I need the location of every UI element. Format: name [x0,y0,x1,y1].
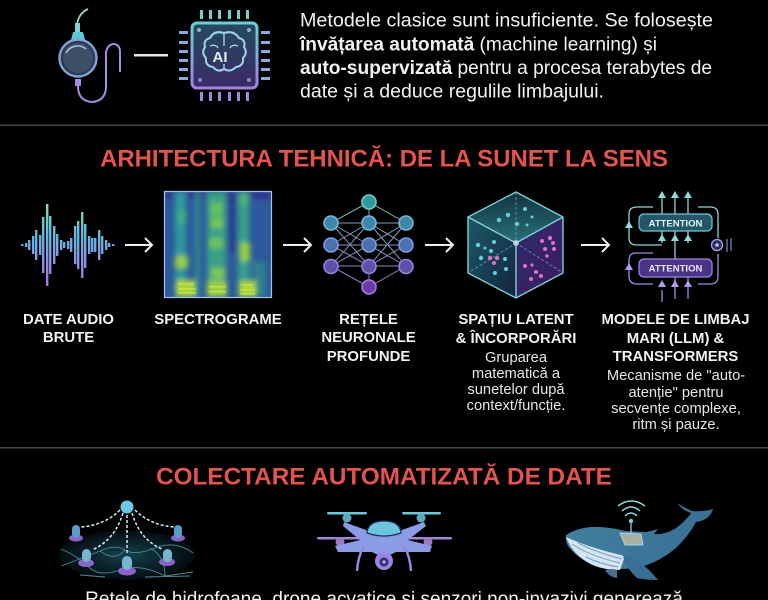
icon: AI chip [179,10,270,101]
description: large language models: atenție" pentru [628,385,724,401]
arrow [581,238,609,252]
label: large language models: MODELE DE LIMBAJ [601,312,750,328]
connector line [134,54,168,56]
icon: neural network [324,195,413,294]
icon: aquatic drone [317,512,452,571]
icon: tagged whale [566,501,713,580]
description: latent space: matematică a [472,366,561,382]
icon: transformer attention: ATTENTION [649,264,702,274]
label: large language models: MARI (LLM) & [627,331,725,347]
intro text: Metodele clasice sunt insuficiente. Se folosește [300,10,713,32]
chart: spectrogram [164,192,272,298]
label: deep neural networks: PROFUNDE [327,349,410,365]
icon: AI chip: AI [212,49,228,66]
label: deep neural networks: NEURONALE [321,330,416,346]
intro text: date și a deduce regulile limbajului. [300,80,604,102]
icon: audio waveform [21,204,114,286]
panel: automated data collection [59,462,713,600]
icon: hydrophone network [59,500,195,580]
panel: intro [60,9,713,102]
arrow [425,238,453,252]
heading: technical architecture: ARHITECTURA TEHNICĂ: DE LA SUNET LA SENS [100,144,668,172]
label: latent space: SPAȚIU LATENT [458,312,574,328]
icon: hydrophone [60,9,120,102]
intro text: învățarea automată (machine learning) și [299,34,657,56]
description: latent space: sunetelor după [467,382,565,398]
panel: technical architecture [21,144,750,433]
description: large language models: ritm și pauze. [632,417,720,433]
label: deep neural networks: REȚELE [339,312,398,328]
label: large language models: TRANSFORMERS [613,349,738,365]
icon: transformer attention [625,191,731,302]
intro text: auto-supervizată pentru a procesa terabytes de [300,57,712,79]
description: large language models: Mecanisme de "auto- [607,368,745,384]
arrow [125,238,152,252]
label: latent space: & ÎNCORPORĂRI [456,329,576,347]
label: raw audio data: BRUTE [43,330,94,346]
description: latent space: Gruparea [485,350,548,366]
heading: automated data collection: COLECTARE AUTOMATIZATĂ DE DATE [156,462,612,490]
icon: transformer attention: ATTENTION [649,218,702,230]
description: large language models: secvențe complexe, [611,401,741,417]
intro text [299,10,713,102]
arrow [283,238,311,252]
label: raw audio data: DATE AUDIO [23,312,114,328]
icon: latent space cube [468,192,563,298]
label: spectrograms: SPECTROGRAME [154,312,282,328]
description: latent space: context/funcție. [467,398,565,414]
